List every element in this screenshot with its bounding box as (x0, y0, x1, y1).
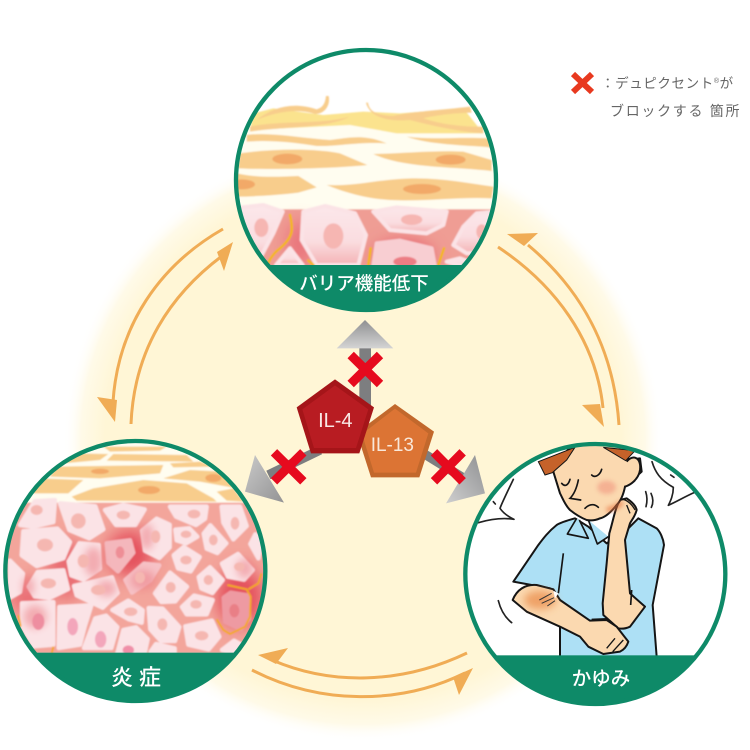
ear (625, 458, 640, 487)
block mark: left arrow (274, 452, 303, 481)
lower arm (513, 585, 628, 654)
raised arm (603, 498, 645, 629)
arrow: to inflammation (245, 450, 320, 503)
face (597, 481, 616, 494)
arrow: up to barrier (337, 320, 393, 407)
block mark: up arrow (351, 355, 380, 384)
yellow nerves (267, 215, 444, 265)
upper tan fibres (237, 96, 493, 200)
nuclei (31, 505, 245, 655)
label: itching: かゆみ (572, 668, 630, 690)
skin cells (233, 205, 497, 267)
green band (270, 265, 462, 308)
fingers at neck (620, 499, 635, 513)
yellow nerves (18, 573, 262, 653)
stratum background (230, 125, 500, 212)
pentagon: IL-4: IL-4 (318, 410, 353, 432)
inflamed tissue (0, 503, 270, 653)
legend (573, 74, 741, 119)
cycle arrows: barrier to inflammation (97, 229, 233, 424)
label: barrier dysfunction: バリア機能低下 (299, 273, 429, 294)
cycle arrows: inflammation and itch (252, 648, 473, 697)
head (553, 443, 642, 520)
nuclei in stratum (228, 154, 466, 194)
panel: barrier dysfunction (228, 50, 500, 312)
yellow horny layer (250, 108, 483, 133)
cells (10, 500, 261, 653)
central diagram: cytokines and blocked signals (245, 320, 485, 503)
collar (567, 518, 608, 544)
panel: inflammation (0, 440, 270, 703)
green band (37, 652, 234, 699)
legend text line 1: ® (714, 77, 720, 85)
arrow: to itching (423, 453, 485, 503)
reddened patches on cells (22, 523, 253, 628)
pink epidermis (263, 208, 490, 265)
pillow-like outlines (478, 462, 694, 623)
legend text line 1: が (720, 76, 734, 91)
label: inflammation: 炎 症 (111, 665, 161, 690)
block mark: right arrow (434, 452, 463, 481)
horny layer (28, 443, 230, 502)
pentagon: IL-13: IL-13 (371, 435, 414, 456)
panel: itching (460, 443, 730, 705)
pentagon: IL-4 (297, 379, 374, 453)
green band (496, 655, 694, 702)
shirt (513, 518, 664, 657)
legend text line 1: ：デュピクセント (601, 76, 714, 91)
hair (538, 447, 575, 475)
legend text line 2: ブロックする 箇所 (610, 103, 741, 119)
pentagon: IL-13 (357, 404, 434, 477)
legend icon: red cross (573, 74, 592, 92)
cycle arrows: barrier to itch (498, 233, 619, 427)
